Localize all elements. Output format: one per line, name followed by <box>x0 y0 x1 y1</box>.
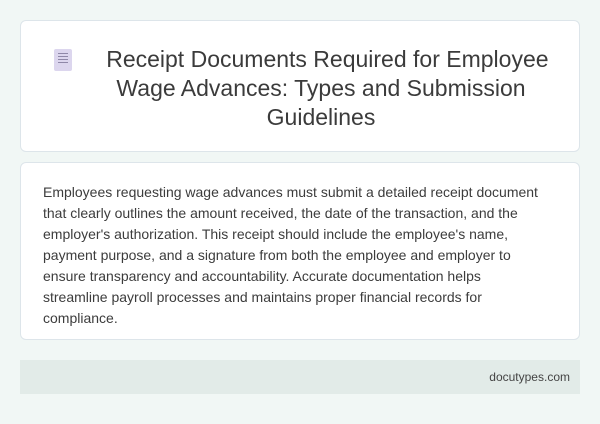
icon: receipt <box>54 49 72 71</box>
footer text: docutypes.com <box>489 370 570 384</box>
footer <box>20 360 580 394</box>
panel: title <box>20 20 580 152</box>
panel: description <box>20 162 580 340</box>
title text: Receipt Documents Required for Employee Wage Advances: Types and Submission Guidelines <box>106 46 549 130</box>
description text: Employees requesting wage advances must submit a detailed receipt document that clearly outlines the amount received, the date of the transaction, and the employer's authorization. This receipt should include the employee's name, payment purpose, and a signature from both the employee and employer to ensure transparency and accountability. Accurate documentation helps streamline payroll processes and maintains proper financial records for compliance. <box>43 184 538 326</box>
